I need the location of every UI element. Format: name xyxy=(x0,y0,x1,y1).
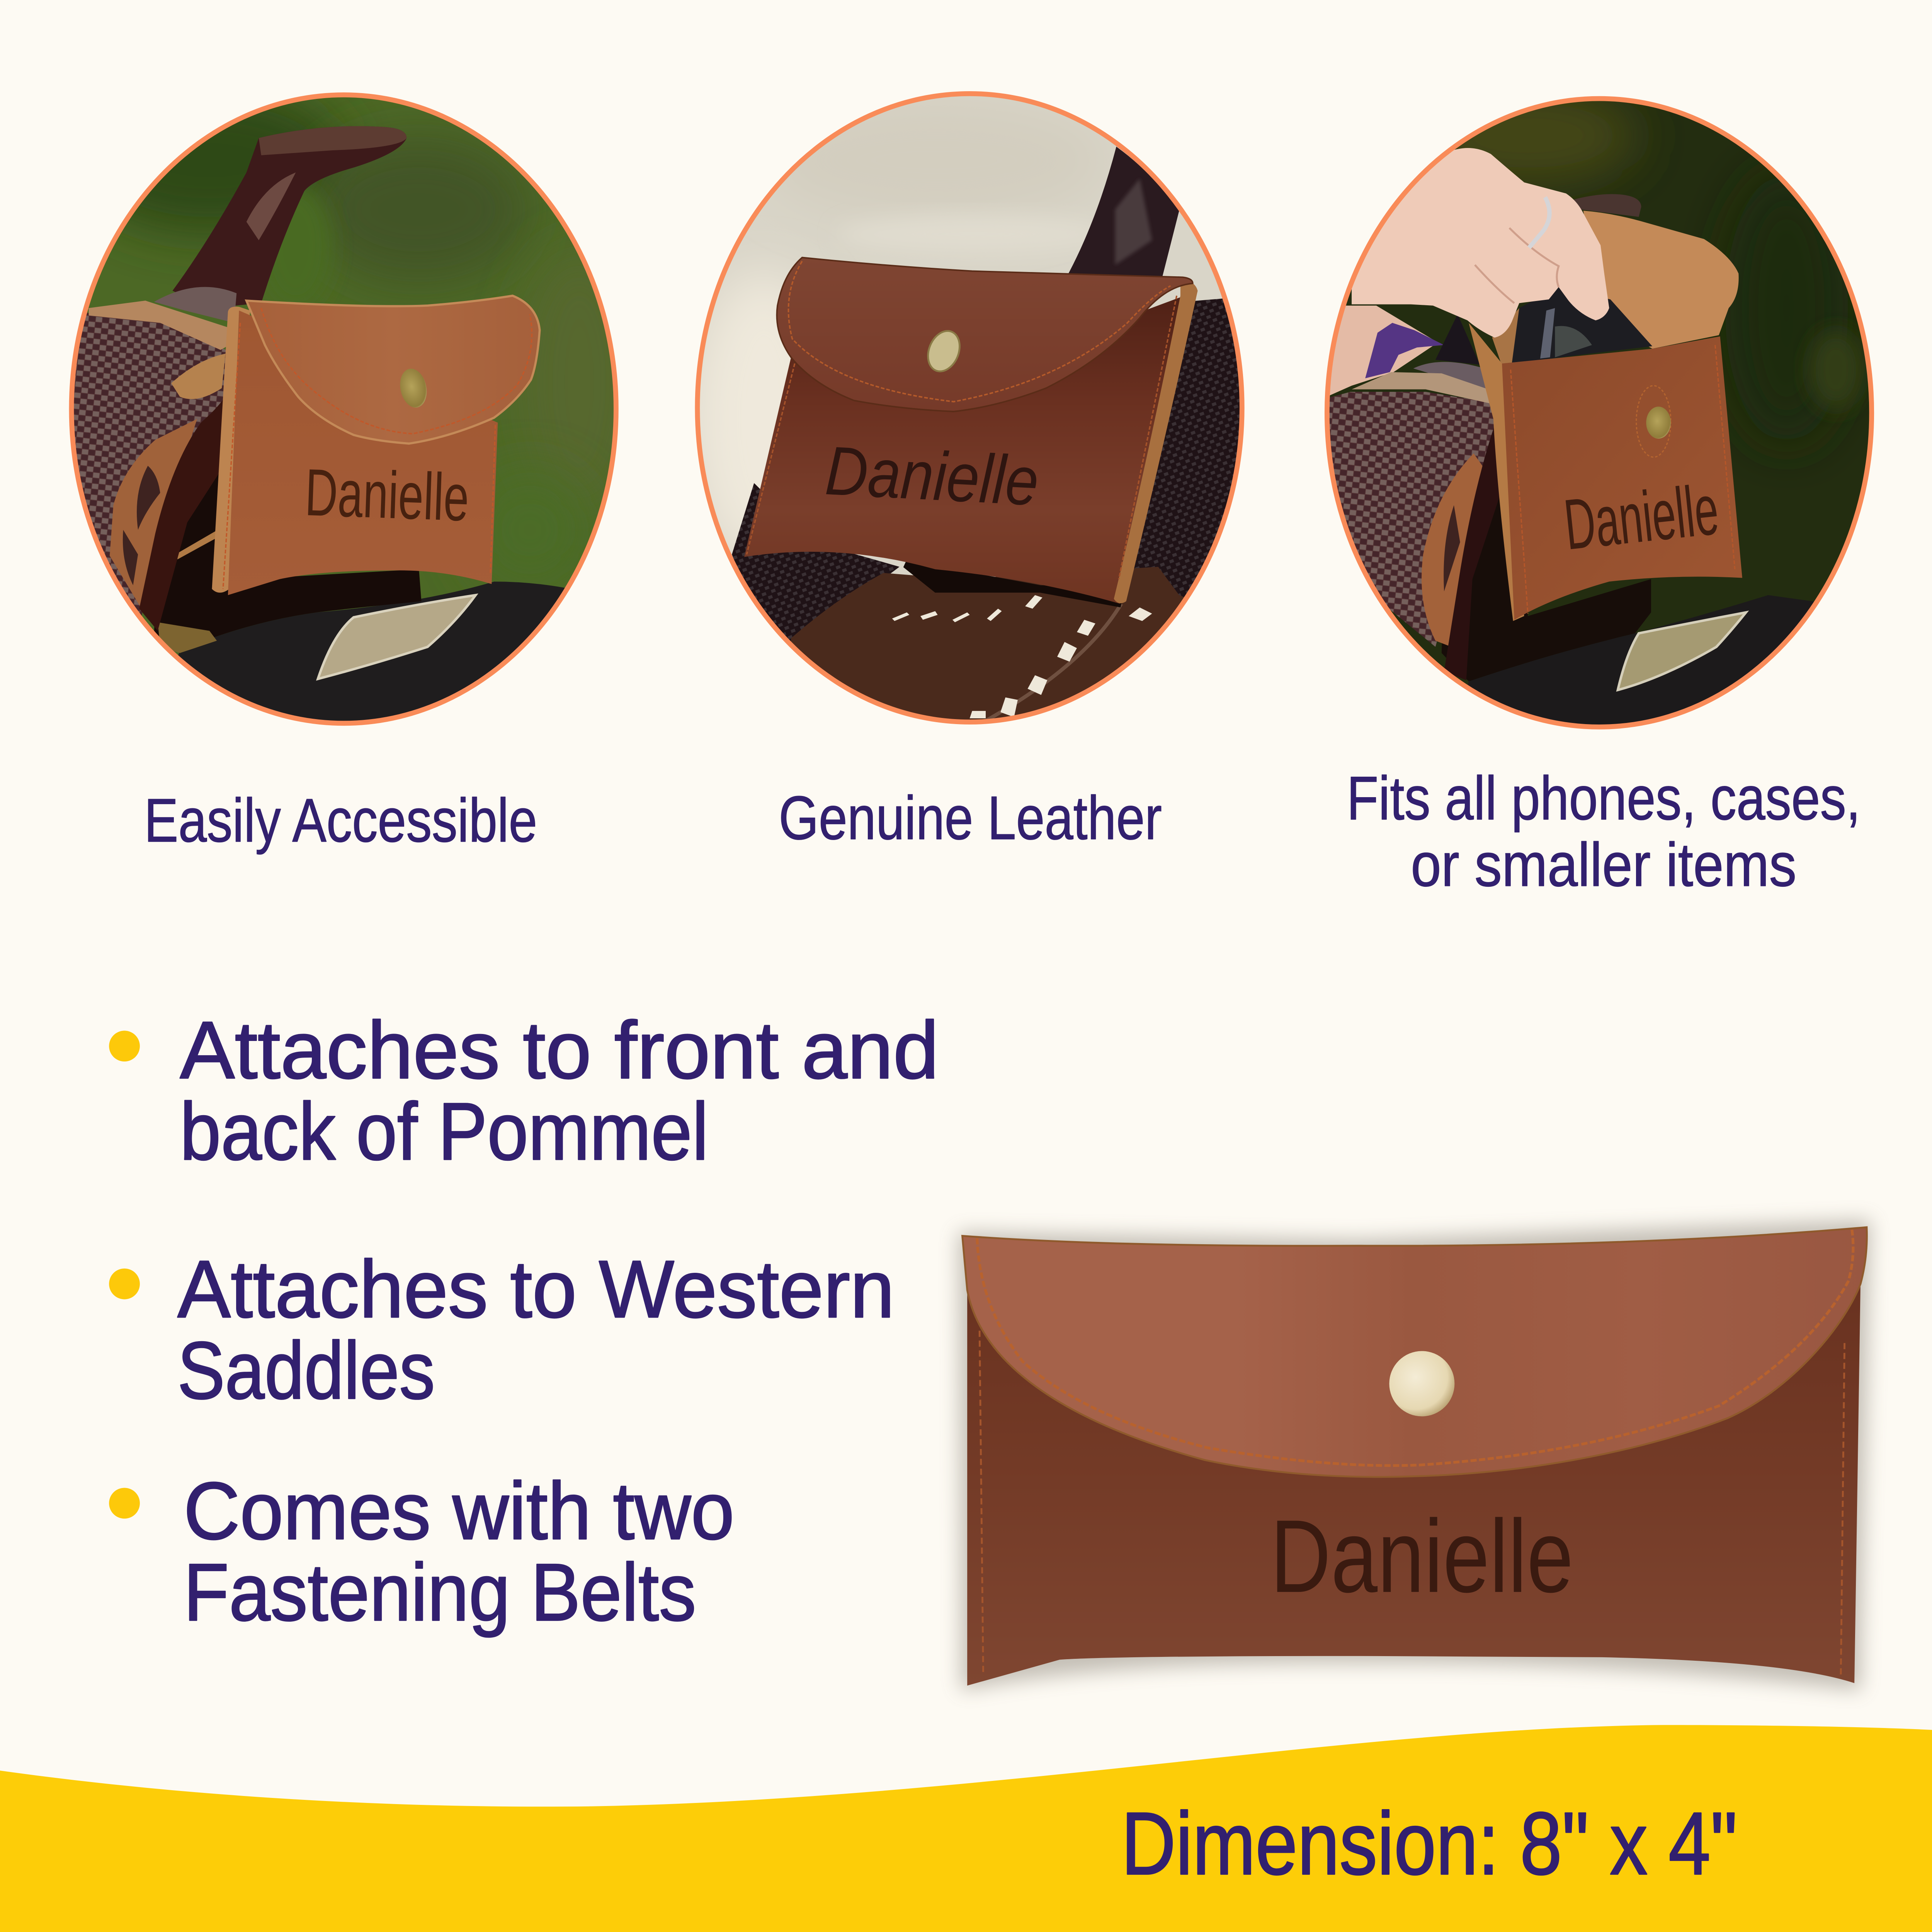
felt pad xyxy=(1454,595,1885,745)
phone camera xyxy=(1555,326,1592,357)
dark saddle strap xyxy=(1444,425,1501,680)
caption: genuine leather: Genuine Leather xyxy=(779,784,1162,852)
bullet: attaches to pommel xyxy=(109,1004,939,1177)
white lacing xyxy=(892,595,1152,718)
leather band xyxy=(89,301,229,350)
bullet: attaches to pommel: back of Pommel xyxy=(180,1086,709,1177)
snap button xyxy=(1389,1351,1454,1416)
flap stitching xyxy=(261,308,532,434)
bullet list xyxy=(109,1004,939,1638)
pommel horn xyxy=(172,126,406,308)
black horn xyxy=(1435,314,1480,365)
phone xyxy=(1512,287,1652,364)
orange ring xyxy=(1327,99,1872,727)
dark under saddle xyxy=(1442,419,1651,681)
open flap suede xyxy=(1583,211,1739,349)
horn xyxy=(1066,146,1179,283)
photo circle: easily accessible xyxy=(61,86,641,739)
suede seam xyxy=(986,604,1121,721)
ring xyxy=(1529,197,1549,248)
caption: fits all phones: or smaller items xyxy=(1411,830,1796,899)
pouch xyxy=(212,296,540,595)
black shadow below pouch xyxy=(154,370,422,651)
bullet: fastening belts xyxy=(109,1465,735,1638)
bullet: western saddles: Saddles xyxy=(177,1325,435,1416)
engraved name: Danielle xyxy=(304,455,470,535)
engraved name: Danielle xyxy=(823,432,1041,520)
pouch body xyxy=(967,1281,1861,1685)
pouch body xyxy=(228,311,498,595)
bullet: western saddles: Attaches to Western xyxy=(177,1243,895,1335)
pouch xyxy=(744,257,1197,604)
horn highlight xyxy=(247,172,296,240)
snake skin patch xyxy=(1618,612,1746,690)
scalloped horn base xyxy=(154,287,236,323)
dark saddle strap xyxy=(139,396,226,631)
finger creases xyxy=(1475,228,1559,303)
arm xyxy=(1318,306,1438,400)
bullet: western saddles xyxy=(109,1243,895,1416)
dimension label: Dimension: 8" x 4" xyxy=(1121,1794,1737,1893)
scalloped band xyxy=(1413,362,1493,392)
black felt pad xyxy=(148,582,641,739)
pouch flap xyxy=(777,257,1193,412)
engraved name: Danielle xyxy=(1270,1498,1573,1614)
saddle tan strap xyxy=(177,531,216,560)
basket weave skirt xyxy=(61,311,229,616)
soft shadow xyxy=(959,1220,1871,1690)
horn cap xyxy=(1573,194,1641,217)
horn highlight xyxy=(1115,179,1152,265)
neutral blurred background xyxy=(690,86,1257,739)
pouch body xyxy=(1502,337,1742,620)
photo circle: genuine leather xyxy=(690,86,1257,739)
pouch body xyxy=(744,291,1197,604)
caption: fits all phones xyxy=(1347,764,1861,899)
body side stitching xyxy=(980,1331,1845,1676)
dark green background xyxy=(1318,86,1885,745)
yellow wave footer xyxy=(0,1725,1932,1932)
bullet: attaches to pommel: Attaches to front and xyxy=(180,1004,939,1095)
side edge xyxy=(1114,279,1197,603)
suede xyxy=(789,567,1232,739)
stitched circle xyxy=(1636,386,1671,457)
caption: easily accessible: Easily Accessible xyxy=(144,786,537,855)
suede patch xyxy=(1492,308,1519,366)
pouch xyxy=(1469,323,1742,621)
hand xyxy=(1318,148,1609,338)
flap stitching xyxy=(977,1230,1853,1466)
pouch side edge xyxy=(212,306,250,593)
shadow below pouch xyxy=(906,564,1121,604)
leather band xyxy=(1352,372,1493,404)
straw detail xyxy=(158,622,217,653)
carved floral tooling xyxy=(110,354,226,611)
photo circle: fits phones xyxy=(1318,86,1885,745)
edge stitching xyxy=(1510,345,1735,614)
pouch flap xyxy=(247,296,540,444)
engraved name: Danielle xyxy=(1561,469,1722,565)
phone edge xyxy=(1540,308,1555,359)
snake skin patch xyxy=(318,595,476,679)
side edge xyxy=(1469,323,1524,621)
bullet: fastening belts: Fastening Belts xyxy=(184,1546,696,1638)
purple watch strap xyxy=(1365,323,1444,378)
basket weave skirt xyxy=(1318,392,1501,647)
bullet: fastening belts: Comes with two xyxy=(184,1465,735,1556)
large product pouch xyxy=(959,1220,1871,1690)
side stitching xyxy=(223,323,495,589)
snap button xyxy=(396,366,430,410)
basket weave xyxy=(732,296,1257,665)
pouch flap xyxy=(962,1227,1867,1477)
green blurred background xyxy=(61,86,641,739)
left stitching xyxy=(747,296,1177,579)
orange ring xyxy=(71,95,616,723)
flap stitching xyxy=(788,261,1170,402)
carved floral tooling xyxy=(1422,453,1488,647)
orange ring xyxy=(697,94,1242,722)
snap stud xyxy=(1646,406,1671,439)
snap button xyxy=(922,326,965,376)
horn cap xyxy=(259,126,406,155)
